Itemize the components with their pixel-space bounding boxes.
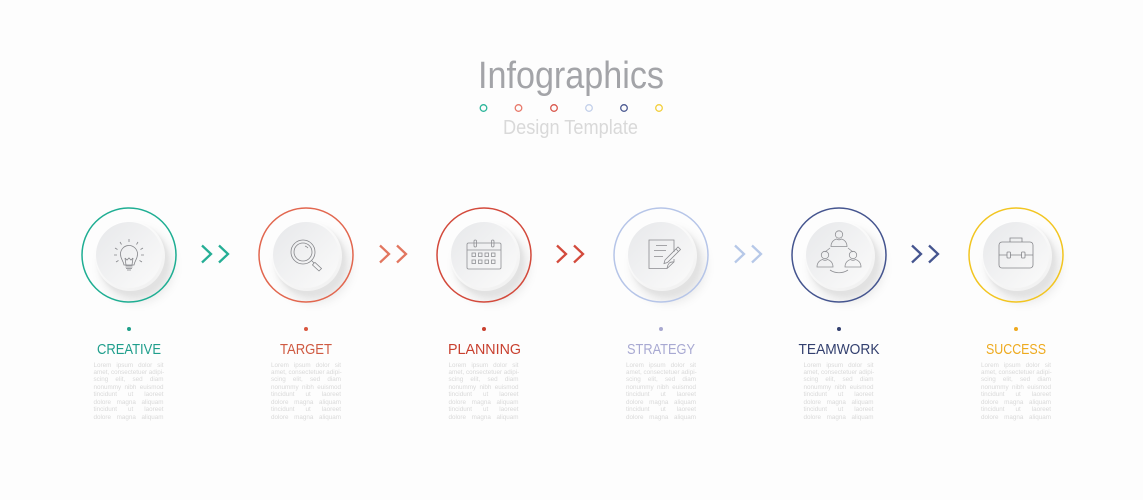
description: scing elit, sed diam: [94, 376, 164, 383]
description: Lorem ipsum dolor sit: [448, 362, 518, 368]
step: planning: [436, 207, 532, 421]
description: Lorem ipsum dolor sit: [981, 362, 1051, 368]
description: tincidunt ut laoreet: [626, 406, 696, 413]
description: scing elit, sed diam: [448, 376, 518, 383]
icon disc: document and pencil: [613, 207, 709, 304]
label: STRATEGY: [627, 341, 695, 358]
description: scing elit, sed diam: [804, 376, 874, 383]
description: dolore magna aliquam: [626, 399, 696, 406]
description: scing elit, sed diam: [271, 376, 341, 383]
description: [626, 362, 697, 421]
description: amet, consectetuer adipi-: [448, 369, 519, 376]
description: tincidunt ut laoreet: [981, 406, 1051, 413]
description: scing elit, sed diam: [626, 376, 696, 383]
description: dolore magna aliquam: [94, 399, 164, 406]
marker dot: [659, 327, 663, 331]
description: [448, 362, 519, 421]
description: dolore magna aliquam: [448, 399, 518, 406]
description: dolore magna aliquam: [94, 414, 164, 421]
description: nonummy nibh euismod: [626, 384, 696, 391]
marker dot: [1014, 327, 1018, 331]
description: dolore magna aliquam: [271, 399, 341, 406]
description: Lorem ipsum dolor sit: [804, 362, 874, 368]
description: amet, consectetuer adipi-: [804, 369, 874, 376]
description: tincidunt ut laoreet: [94, 391, 164, 398]
marker dot: [126, 327, 130, 331]
icon disc: magnifier: [258, 207, 354, 304]
description: nonummy nibh euismod: [448, 384, 518, 391]
description: tincidunt ut laoreet: [271, 391, 341, 398]
description: Lorem ipsum dolor sit: [94, 362, 164, 368]
description: amet, consectetuer adipi-: [626, 369, 697, 376]
description: dolore magna aliquam: [981, 414, 1051, 421]
label: PLANNING: [448, 341, 520, 358]
step: strategy: [613, 207, 709, 421]
step: success: [968, 207, 1064, 421]
title dots row: [480, 104, 663, 112]
icon disc: three people cycle: [791, 207, 887, 304]
description: nonummy nibh euismod: [804, 384, 874, 391]
arrows 1: [201, 244, 230, 264]
description: tincidunt ut laoreet: [448, 391, 518, 398]
description: scing elit, sed diam: [981, 376, 1051, 383]
arrows 4: [734, 244, 762, 264]
marker dot: [304, 327, 308, 331]
description: dolore magna aliquam: [448, 414, 518, 421]
description: dolore magna aliquam: [981, 399, 1051, 406]
description: tincidunt ut laoreet: [448, 406, 518, 413]
description: tincidunt ut laoreet: [94, 406, 164, 413]
icon disc: light bulb: [81, 207, 177, 304]
step: teamwork: [791, 207, 887, 421]
description: dolore magna aliquam: [271, 414, 341, 421]
step: creative: [81, 207, 177, 421]
icon disc: calendar: [436, 207, 532, 304]
step: target: [258, 207, 354, 421]
arrows 5: [911, 244, 940, 264]
description: nonummy nibh euismod: [94, 384, 164, 391]
description: tincidunt ut laoreet: [626, 391, 696, 398]
description: amet, consectetuer adipi-: [271, 369, 342, 376]
description: [94, 362, 164, 421]
description: [271, 362, 342, 421]
description: tincidunt ut laoreet: [271, 406, 341, 413]
label: TEAMWORK: [798, 341, 879, 358]
description: amet, consectetuer adipi-: [981, 369, 1052, 376]
description: Lorem ipsum dolor sit: [271, 362, 341, 368]
description: tincidunt ut laoreet: [981, 391, 1051, 398]
description: nonummy nibh euismod: [271, 384, 341, 391]
description: dolore magna aliquam: [626, 414, 696, 421]
description: dolore magna aliquam: [804, 399, 874, 406]
description: tincidunt ut laoreet: [804, 391, 874, 398]
label: SUCCESS: [986, 341, 1046, 358]
description: Lorem ipsum dolor sit: [626, 362, 696, 368]
label: CREATIVE: [96, 341, 160, 358]
description: nonummy nibh euismod: [981, 384, 1051, 391]
description: dolore magna aliquam: [804, 414, 874, 421]
description: amet, consectetuer adipi-: [94, 369, 164, 376]
label: TARGET: [280, 341, 332, 358]
marker dot: [482, 327, 486, 331]
icon disc: briefcase: [968, 207, 1064, 304]
description: [981, 362, 1052, 421]
marker dot: [836, 327, 840, 331]
arrows 2: [379, 244, 408, 264]
arrows 3: [556, 244, 585, 264]
description: [804, 362, 874, 421]
description: tincidunt ut laoreet: [804, 406, 874, 413]
